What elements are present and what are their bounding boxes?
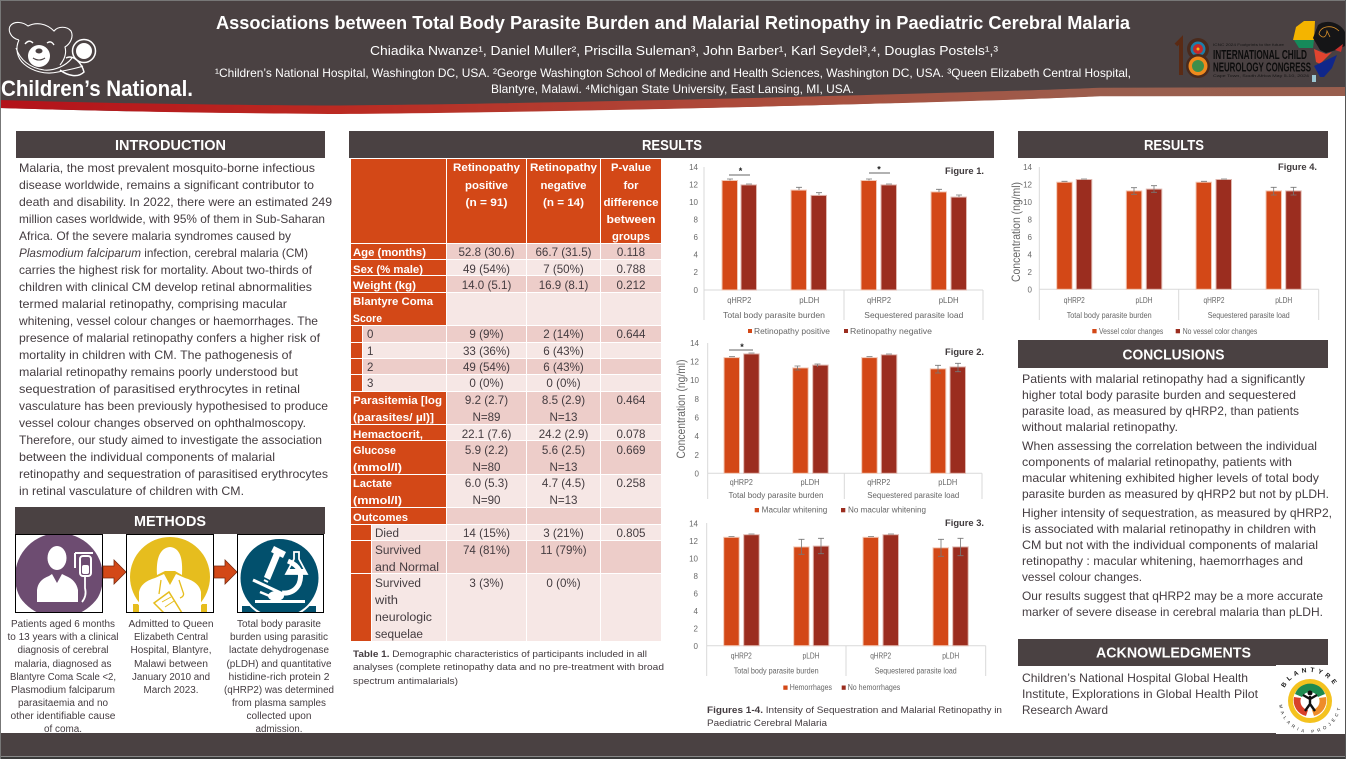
table values: 0.788 (616, 263, 646, 276)
bar chart: figure 2: * (740, 342, 744, 352)
figure caption: Paediatric Cerebral Malaria (707, 718, 828, 729)
section heading: results (right) (1018, 131, 1328, 158)
logo: Blantyre Malaria Project (1276, 665, 1345, 734)
bar chart: figure 3: 2 (694, 624, 699, 634)
text block: method step 3: burden using parasitic (230, 632, 328, 643)
table values: 0.464 (616, 394, 646, 407)
text block: introduction: between the individual components of malarial (19, 450, 275, 464)
text block: conclusions: higher total body parasite burden and sequestered (1022, 388, 1296, 402)
table row labels: Survived (375, 545, 421, 557)
bar chart: figure 3: No hemorrhages (848, 683, 900, 692)
bar chart: figure 1: pLDH (799, 296, 820, 305)
section heading: results (right): RESULTS (1144, 138, 1204, 154)
bar chart: figure 1: qHRP2 (727, 296, 752, 305)
table values: N=80 (472, 461, 501, 474)
section heading: introduction (16, 131, 325, 158)
bar chart: figure 4: Sequestered parasite load (1208, 311, 1290, 320)
table values: 0.258 (616, 477, 646, 490)
bar chart: figure 4: 14 (1023, 163, 1033, 172)
bar chart: figure 2: Figure 2. (945, 347, 984, 358)
table values: 4.7 (4.5) (542, 477, 585, 490)
table values: 6.0 (5.3) (465, 477, 508, 490)
text block: method step 1: other identifiable cause (10, 711, 116, 722)
bar chart: figure 2: 2 (695, 451, 700, 460)
section heading: acknowledgments: ACKNOWLEDGMENTS (1096, 646, 1251, 662)
text block: method step 1: of coma. (44, 724, 82, 735)
table header row: between (606, 214, 656, 226)
bar chart: figure 2: No macular whitening (848, 506, 926, 514)
text block: introduction: Plasmodium falciparum infection, cerebral malaria (CM) (19, 246, 308, 260)
table values: 0.078 (616, 428, 646, 441)
text block: introduction: mortality in children with CM. The pathogenesis of (19, 348, 293, 362)
table values: 6 (43%) (543, 345, 584, 358)
table values: 0.118 (617, 246, 645, 259)
table values: 66.7 (31.5) (535, 246, 592, 259)
section heading: introduction: INTRODUCTION (115, 138, 226, 154)
text block: introduction: Malaria, the most prevalent mosquito-borne infectious (19, 161, 315, 175)
text block: method step 1: Patients aged 6 months (11, 619, 115, 630)
figure caption: Figures 1-4. Intensity of Sequestration and Malarial Retinopathy in (707, 705, 1002, 716)
text block: introduction: whitening, vessel colour changes or haemorrhages. The (18, 314, 318, 328)
bar chart: figure 2: 0 (695, 470, 700, 478)
table values: 0.805 (616, 527, 646, 540)
text block: method step 3: Total body parasite (237, 619, 321, 630)
bar chart: figure 1: * (877, 164, 881, 174)
text block: method step 3: (qHRP2) was determined (224, 685, 334, 696)
icon: patient with IV drip (15, 534, 103, 613)
text block: introduction: malarial retinopathy remains poorly understood but (19, 365, 299, 379)
bar chart: figure 2: 4 (695, 432, 700, 441)
text block: introduction: million cases worldwide, with 95% of them in Sub-Saharan (19, 212, 325, 226)
bar chart: figure 4: 6 (1028, 233, 1033, 242)
table row labels: Weight (kg) (353, 280, 416, 292)
table row labels: 3 (367, 378, 373, 390)
table header row: difference (604, 197, 658, 209)
bar chart: figure 2: pLDH (800, 478, 820, 487)
text block: conclusions: marker of severe disease in cerebral malaria than pLDH. (1022, 605, 1323, 619)
text block: introduction (18, 161, 332, 498)
bar chart: figure 2: Sequestered parasite load (867, 491, 959, 500)
text block: introduction: carries the highest risk for mortality. About two-thirds of (19, 263, 313, 277)
table row labels: sequelae (375, 629, 423, 641)
table row labels: neurologic (375, 612, 432, 624)
table values: 8.5 (2.9) (542, 394, 585, 407)
table header row: positive (465, 180, 508, 192)
bar chart: figure 2: 14 (690, 339, 700, 348)
bar chart: figure 4: qHRP2 (1204, 296, 1225, 305)
table values: 7 (50%) (543, 263, 584, 276)
bar chart: figure 1: 0 (694, 286, 699, 295)
table caption: analyses (complete retinopathy data and no pre-treatment with broad (353, 662, 664, 673)
table caption: Table 1. Demographic characteristics of participants included in all (353, 649, 647, 660)
text block: method step 3: histidine-rich protein 2 (228, 672, 330, 683)
table values: 11 (79%) (540, 544, 587, 557)
table row labels: Blantyre Coma (353, 296, 434, 308)
table values: 9.2 (2.7) (465, 394, 508, 407)
text block: introduction: vessel colour changes observed on ophthalmoscopy. (19, 416, 306, 430)
table row labels: (mmol/l) (353, 495, 402, 507)
bar chart: figure 2: pLDH (938, 478, 957, 487)
table header row: Retinopathy (453, 162, 521, 174)
bar chart: figure 1: pLDH (939, 296, 959, 305)
bar chart: figure 1: Total body parasite burden (723, 311, 825, 320)
table row labels: Outcomes (353, 512, 408, 524)
text block: introduction: disease worldwide, remains a significant contributor to (19, 178, 314, 192)
bar chart: figure 3: 12 (689, 537, 699, 546)
table row labels: Hemactocrit, (353, 429, 423, 441)
bar chart: figure 1: 4 (694, 250, 699, 260)
table values: 0.644 (616, 328, 646, 341)
table row labels: (parasites/ µl)] (353, 412, 434, 424)
bar chart: figure 4: Total body parasite burden (1067, 311, 1152, 320)
table values: N=90 (472, 494, 501, 507)
icon: bear with stethoscope (9, 22, 96, 76)
bar chart: figure 3: qHRP2 (870, 652, 892, 660)
bar chart: figure 3: 6 (694, 590, 699, 598)
affiliations (215, 66, 1131, 96)
header banner (0, 0, 1346, 114)
bar chart: figure 1: 12 (689, 180, 699, 190)
table caption (353, 649, 664, 687)
table values: 0 (0%) (469, 377, 504, 390)
table values: 16.9 (8.1) (539, 279, 588, 292)
text block: introduction: children with clinical CM develop retinal abnormalities (19, 280, 312, 294)
arrow: step 2 to step 3 (214, 560, 237, 584)
text block: conclusions: is associated with malarial retinopathy in children with (1022, 522, 1316, 536)
text block: acknowledgments: Children’s National Hospital Global Health (1022, 671, 1248, 685)
bar chart: figure 2: qHRP2 (867, 478, 891, 487)
text block: acknowledgments: Research Award (1022, 703, 1108, 717)
text block: method step 2: January 2010 and (132, 672, 210, 683)
text block: method step 1: to 13 years with a clinical (8, 632, 118, 643)
table values: 0 (0%) (546, 577, 581, 590)
text block: conclusions: parasite burden as measured by qHRP2 but not by pLDH. (1022, 487, 1329, 501)
bar chart: figure 1: 2 (694, 268, 699, 277)
logo: Blantyre Malaria Project: MALARIA PROJECT (1279, 704, 1340, 734)
table values: 74 (81%) (463, 544, 510, 557)
bar chart: figure 3: 10 (689, 554, 699, 564)
bar chart: figure 4: Concentration (ng/ml) (1009, 182, 1023, 282)
bar chart: figure 4: 0 (1028, 286, 1033, 294)
text block: method step 1: malaria, diagnosed as (14, 659, 112, 670)
bar chart: figure 2: 10 (690, 376, 700, 385)
table values: N=13 (549, 494, 578, 507)
table values: 14.0 (5.1) (462, 279, 511, 292)
figure caption (707, 705, 1002, 729)
text block: introduction: in retinal vasculature of children with CM. (19, 484, 244, 498)
bar chart: figure 4: 12 (1023, 180, 1033, 190)
table row labels: Survived (375, 578, 421, 590)
table row labels: 1 (367, 346, 373, 358)
icon: doctor with clipboard (126, 534, 214, 619)
text block: method step 3: (pLDH) and quantitative (226, 659, 332, 670)
logo: International Child Neurology Congress (1176, 21, 1345, 82)
text block: method step 3: collected upon (246, 711, 312, 722)
affiliations: ¹Children’s National Hospital, Washington DC, USA. ²George Washington School of Medicine and Health Sciences, Washington DC, USA. ³Queen Elizabeth Central Hospital, (215, 66, 1131, 80)
bar chart: figure 2 (674, 339, 984, 514)
bar chart: figure 1: 6 (694, 233, 699, 242)
table values: 9 (9%) (469, 328, 504, 341)
text block: introduction: termed malarial retinopathy, comprising macular (19, 297, 287, 311)
table header row: P-value (611, 162, 651, 174)
text block: method step 2: Admitted to Queen (128, 619, 214, 630)
bar chart: figure 4 (1009, 162, 1319, 336)
table values: 49 (54%) (463, 361, 510, 374)
text block: method step 2 (128, 619, 214, 696)
bar chart: figure 4: 2 (1028, 268, 1033, 277)
table values: 0.212 (616, 279, 646, 292)
authors: Chiadika Nwanze¹, Daniel Muller², Priscilla Suleman³, John Barber¹, Karl Seydel³,⁴, Douglas Postels¹,³ (370, 43, 999, 58)
text block: introduction: sequestration of parasitised erythrocytes in retinal (19, 382, 300, 396)
bar chart: figure 4: pLDH (1275, 296, 1292, 305)
bar chart: figure 4: pLDH (1136, 296, 1153, 305)
bar chart: figure 4: Figure 4. (1278, 162, 1317, 173)
text block: conclusions: When assessing the correlation between the individual (1022, 439, 1317, 453)
text block: method step 1: diagnosis of cerebral (18, 645, 108, 656)
bar chart: figure 2: Concentration (ng/ml) (674, 360, 688, 458)
text block: method step 3 (224, 619, 334, 735)
table row labels: Died (375, 528, 399, 540)
bar chart: figure 2: 8 (695, 395, 700, 404)
bar chart: figure 3: pLDH (942, 652, 959, 660)
bar chart: figure 2: qHRP2 (730, 478, 753, 487)
table values: 14 (15%) (463, 527, 510, 540)
text block: method step 1: Blantyre Coma Scale <2, (10, 672, 116, 683)
bar chart: figure 3: Hemorrhages (790, 683, 832, 692)
table row labels: with (374, 595, 398, 607)
logo: Children's National: Children’s National. (1, 76, 193, 101)
bar chart: figure 1: 14 (689, 163, 699, 172)
table values: 5.6 (2.5) (542, 444, 585, 457)
icon: microscope and flask (238, 534, 324, 619)
table row labels: (mmol/l) (353, 462, 402, 474)
text block: introduction: vasculature has been previously hypothesised to produce (19, 399, 328, 413)
text block: conclusions: CM but not with the individual components of malarial (1022, 538, 1318, 552)
table values: 24.2 (2.9) (539, 428, 588, 441)
section heading: results (centre): RESULTS (642, 138, 702, 154)
table row labels: Glucose (353, 445, 396, 457)
bar chart: figure 2: Total body parasite burden (728, 491, 824, 500)
text block: method step 3: admission. (256, 724, 302, 735)
bar chart: figure 2: Macular whitening (762, 506, 827, 514)
text block: method step 2: Hospital, Blantyre, (130, 645, 212, 656)
table row labels (353, 247, 442, 641)
text block: method step 3: lactate dehydrogenase (229, 645, 329, 656)
table: participant characteristics (351, 159, 661, 641)
table values: 5.9 (2.2) (465, 444, 508, 457)
section heading: conclusions (1018, 340, 1328, 368)
table header row: (n = 14) (543, 197, 584, 209)
table header row: Retinopathy (530, 162, 598, 174)
table values: 2 (14%) (543, 328, 584, 341)
table values: 22.1 (7.6) (462, 428, 511, 441)
bar chart: figure 3: Sequestered parasite load (875, 666, 957, 676)
bar chart: figure 4: qHRP2 (1064, 296, 1085, 305)
table row labels: 2 (367, 362, 373, 374)
bar chart: figure 1: 8 (694, 216, 699, 224)
table values: N=89 (472, 411, 501, 424)
table values: 6 (43%) (543, 361, 584, 374)
table values: 3 (21%) (543, 527, 584, 540)
table values: 33 (36%) (463, 345, 510, 358)
text block: conclusions: parasite load, as measured by qHRP2, than patients (1022, 404, 1299, 418)
text block: conclusions: Our results suggest that qHRP2 may be a more accurate (1022, 589, 1323, 603)
table row labels: Parasitemia [log (353, 395, 442, 407)
table row backgrounds (351, 159, 661, 641)
affiliations: Blantyre, Malawi. ⁴Michigan State University, East Lansing, MI, USA. (491, 82, 854, 96)
bar chart: figure 4: No vessel color changes (1183, 327, 1257, 336)
bar chart: figure 3: pLDH (802, 652, 820, 660)
text block: method step 2: Elizabeth Central (134, 632, 208, 643)
table values: 0 (0%) (546, 377, 581, 390)
arrow: step 1 to step 2 (103, 560, 126, 584)
text block: acknowledgments (1022, 671, 1259, 717)
text block: introduction: Therefore, our study aimed to investigate the association (19, 433, 322, 447)
bar chart: figure 3: 14 (689, 520, 699, 528)
text block: introduction: death and disability. In 2022, there were an estimated 249 (19, 195, 332, 209)
text block: method step 1: parasitaemia and no (18, 698, 108, 709)
bar chart: figure 3: Total body parasite burden (734, 666, 819, 676)
text block: conclusions: vessel colour changes. (1022, 570, 1142, 584)
bar chart: figure 3: 4 (694, 607, 699, 616)
table row labels: and Normal (375, 562, 439, 574)
bar chart: figure 4: 10 (1023, 198, 1033, 207)
table row labels: Sex (% male) (353, 264, 423, 276)
text block: introduction: retinopathy and sequestration of parasitised erythrocytes (19, 467, 328, 481)
text block: conclusions: Higher intensity of sequestration, as measured by qHRP2, (1022, 506, 1332, 520)
bar chart: figure 2: 6 (695, 414, 700, 422)
table caption: spectrum antimalarials) (353, 676, 458, 687)
table values: 0.669 (616, 444, 646, 457)
text block: acknowledgments: Institute, Explorations in Global Health Pilot (1022, 687, 1259, 701)
bar chart: figure 3: 8 (694, 572, 699, 581)
text block: method step 1 (8, 619, 118, 735)
table header row: (n = 91) (466, 197, 508, 209)
section heading: methods (15, 507, 325, 534)
title: Associations between Total Body Parasite Burden and Malarial Retinopathy in Paediatric Cerebral Malaria (216, 13, 1131, 33)
table values: N=13 (549, 411, 578, 424)
logo: International Child Neurology Congress: ICNC 2024 Footprints to the future (1213, 42, 1285, 47)
table header row: for (624, 180, 639, 192)
text block: conclusions: macular whitening exhibited higher levels of total body (1022, 471, 1319, 485)
logo: Children's National (1, 22, 193, 101)
text block: conclusions: without malarial retinopathy. (1021, 420, 1178, 434)
table row labels: 0 (367, 329, 373, 341)
section heading: acknowledgments (1018, 639, 1328, 666)
bar chart: figure 1: Retinopathy negative (850, 327, 933, 336)
table values (458, 246, 646, 590)
bar chart: figure 1: Figure 1. (945, 166, 984, 177)
text block: introduction: presence of malarial retinopathy confers a higher risk of (19, 331, 321, 345)
section heading: results (centre) (349, 131, 994, 158)
table row labels: Age (months) (353, 247, 426, 259)
text block: conclusions (1021, 372, 1332, 619)
section heading: methods: METHODS (134, 514, 206, 530)
text block: conclusions: retinopathy : macular whitening, haemorrhages and (1022, 554, 1303, 568)
bar chart: figure 3 (689, 518, 986, 692)
text block: method step 3: from plasma samples (232, 698, 326, 709)
table row labels: Score (353, 313, 382, 325)
bar chart: figure 1: Sequestered parasite load (864, 311, 963, 320)
text block: method step 1: Plasmodium falciparum (11, 685, 115, 696)
bar chart: figure 2: 12 (690, 358, 700, 366)
bar chart: figure 1: Retinopathy positive (754, 327, 831, 336)
bar chart: figure 4: 8 (1028, 216, 1033, 224)
bar chart: figure 4: 4 (1028, 250, 1033, 260)
text block: conclusions: components of malarial retinopathy, patients with (1022, 455, 1292, 469)
logo: Blantyre Malaria Project: BLANTYRE (1281, 667, 1337, 688)
table header row: negative (540, 180, 586, 192)
bar chart: figure 3: Figure 3. (945, 518, 984, 529)
bar chart: figure 1: qHRP2 (867, 296, 892, 305)
bar chart: figure 1: * (739, 166, 743, 176)
table values: 49 (54%) (463, 263, 510, 276)
bar chart: figure 3: 0 (694, 642, 699, 651)
text block: introduction: Africa. Of the severe malaria syndromes caused by (19, 229, 291, 243)
table header row (453, 162, 658, 243)
bar chart: figure 1: 10 (689, 198, 699, 207)
text block: conclusions: Patients with malarial retinopathy had a significantly (1022, 372, 1305, 386)
section heading: conclusions: CONCLUSIONS (1122, 348, 1225, 364)
table row labels: Lactate (353, 478, 392, 490)
bar chart: figure 1 (689, 163, 984, 336)
bar chart: figure 4: Vessel color changes (1099, 327, 1163, 336)
bar chart: figure 3: qHRP2 (731, 652, 752, 660)
text block: method step 2: March 2023. (144, 685, 198, 696)
text block: method step 2: Malawi between (134, 659, 208, 670)
logo: International Child Neurology Congress: Cape Town, South Africa May 5-10, 2024 (1213, 73, 1310, 78)
table values: 3 (3%) (469, 577, 504, 590)
table header row: groups (612, 231, 650, 243)
table values: N=13 (549, 461, 578, 474)
table values: 52.8 (30.6) (458, 246, 515, 259)
